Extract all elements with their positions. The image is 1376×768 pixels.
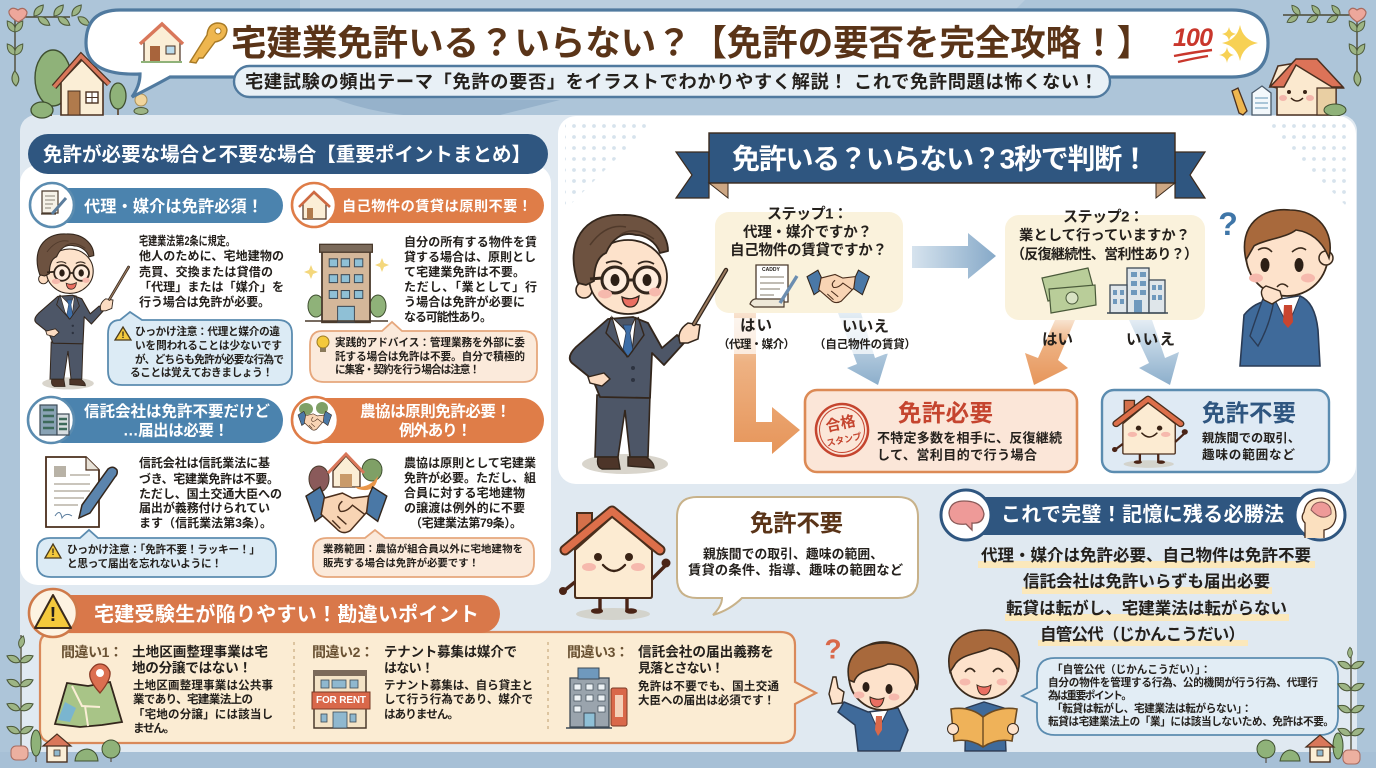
step 1: 代理・媒介ですか？	[743, 223, 872, 241]
arrow: step 2 no	[1129, 320, 1179, 385]
heading	[941, 490, 1345, 540]
icon: pass stamp	[811, 399, 873, 461]
mnemonic lines	[978, 545, 1315, 646]
mistake 1: 「宅地の分譲」には該当し	[133, 707, 273, 721]
icon: teacher	[570, 215, 726, 474]
icon: thinking student: ?	[1218, 206, 1238, 242]
icon: handshake with house and vegetables	[306, 454, 387, 533]
text block	[139, 233, 284, 309]
card: agency	[30, 183, 292, 389]
callout: advice: に集客・契約を行う場合は注意！	[335, 363, 480, 376]
subtitle pill	[234, 66, 1110, 97]
branch labels: （代理・媒介）	[718, 337, 795, 351]
callout: trap	[37, 530, 276, 577]
top-left corner vine	[5, 3, 92, 86]
text block: 合員に対する宅地建物	[404, 485, 525, 500]
branch labels: はい	[740, 318, 772, 334]
icon: office with sign	[566, 668, 627, 728]
mistake 2: テナント募集は、自ら貸主と	[384, 678, 533, 692]
branch labels: いいえ	[842, 318, 889, 336]
callout: advice: 託する場合は免許は不要。自分で積極的	[335, 350, 525, 363]
mistake 2: はありません。	[384, 708, 459, 721]
branch labels: いいえ	[1126, 330, 1175, 348]
icon: handshake	[807, 270, 869, 303]
text block: 届出が義務付けられてい	[139, 500, 270, 515]
callout: trap: !	[122, 330, 124, 340]
icon: for rent building	[312, 670, 370, 728]
card heading: 農協は原則免許必要！	[360, 402, 511, 420]
text block: 信託会社は信託業法に基	[139, 455, 270, 470]
icon: pass stamp: スタンプ	[825, 430, 863, 448]
callout: advice	[310, 322, 537, 382]
card: trust company	[28, 397, 283, 577]
callout: scope: 業務範囲：農協が組合員以外に宅地建物を	[323, 542, 523, 556]
icon: house character	[559, 511, 670, 620]
mnemonic lines: 自管公代（じかんこうだい）	[1040, 624, 1245, 644]
card heading: …届出は必要！	[123, 422, 229, 440]
panel: memory tips	[941, 490, 1345, 735]
text block: 他人のために、宅地建物の	[139, 248, 284, 263]
mistake 1: 土地区画整理事業は宅	[132, 644, 268, 660]
icon: for rent building: FOR RENT	[316, 695, 366, 706]
callout: trap: が、どちらも免許が必要な行為で	[135, 353, 284, 366]
icon: pointing student	[824, 634, 918, 751]
mistake 3	[566, 644, 780, 728]
callout: scope	[313, 530, 534, 577]
card heading	[292, 397, 544, 443]
top-left house scene	[31, 50, 148, 118]
text block	[404, 234, 537, 324]
icon: document and pen	[46, 457, 117, 527]
result: license required: して、営利目的で行う場合	[877, 448, 1037, 462]
callout: trap: と思って届出を忘れないように！	[67, 557, 222, 570]
panel: license summary	[20, 134, 551, 585]
icon: teacher	[35, 234, 129, 389]
result: license not required	[1102, 390, 1329, 472]
step 2: （反復継続性、営利性あり？）	[1011, 246, 1198, 262]
mistake 1	[55, 644, 274, 735]
mnemonic lines: 信託会社は免許いらずも届出必要	[1023, 571, 1270, 591]
mistake 1: 土地区画整理事業は公共事	[133, 678, 274, 692]
text block: 行う場合は免許が必要。	[139, 294, 270, 309]
card heading: 例外あり！	[399, 420, 472, 440]
text block: 農協は原則として宅建業	[404, 455, 536, 470]
bottom-left plant scene	[6, 635, 120, 762]
text block: 貸する場合は、原則とし	[404, 249, 536, 264]
arrow: step 1 no	[838, 313, 888, 385]
step 1	[715, 206, 903, 313]
branch labels: （自己物件の賃貸）	[814, 337, 916, 351]
text block: の譲渡は例外的に不要	[404, 500, 525, 515]
icon: contract: CADDY	[762, 267, 780, 273]
icon: map with pin	[55, 664, 122, 727]
speech bubble: not required: 賃貸の条件、指導、趣味の範囲など	[688, 562, 903, 578]
branch labels	[716, 318, 1175, 354]
icon: pass stamp: 合格	[824, 412, 857, 436]
callout: explanation: 「自管公代（じかんこうだい）」：	[1052, 663, 1211, 676]
mistake 2: して行う行為であり、媒介で	[384, 692, 533, 706]
text block: （宅建業法第79条）。	[410, 515, 522, 530]
text block	[139, 455, 282, 530]
mistake 1: ません。	[133, 722, 175, 735]
speech bubble: not required: 免許不要	[750, 510, 843, 536]
text block: 免許が必要。ただし、組	[404, 470, 536, 485]
mistake 3: 大臣への届出は必須です！	[638, 693, 775, 707]
icon: title house	[140, 24, 183, 62]
text block: ただし、「業として」行	[404, 279, 537, 294]
icon: pointing student: ?	[824, 634, 842, 664]
heading: 宅建受験生が陥りやすい！勘違いポイント	[94, 602, 479, 626]
result: license not required: 免許不要	[1202, 400, 1296, 426]
bottom-right plant scene	[1257, 647, 1365, 764]
banner heading	[676, 133, 1205, 198]
card: agricultural cooperative	[292, 397, 544, 577]
callout: explanation: 為は重要ポイント。	[1048, 689, 1132, 702]
result: license not required: 趣味の範囲など	[1202, 447, 1295, 462]
callout: trap: ることは覚えておきましょう！	[130, 366, 273, 379]
text block: ます（信託業法第3条）。	[139, 515, 272, 530]
step 1: 自己物件の賃貸ですか？	[730, 241, 887, 259]
result: license not required: 親族間での取引、	[1202, 430, 1300, 445]
icon: reading student	[948, 630, 1019, 751]
card heading	[30, 183, 283, 227]
branch labels: はい	[1042, 332, 1073, 348]
callout: trap: ひっかけ注意：「免許不要！ラッキー！」	[67, 543, 260, 556]
title: 宅建業免許いる？いらない？【免許の要否を完全攻略！】	[231, 23, 1152, 63]
text block	[404, 455, 536, 530]
text block: 宅建業法第2条に規定。	[139, 233, 235, 248]
card heading: 代理・媒介は免許必須！	[84, 197, 263, 216]
mistake 3: 免許は不要でも、国土交通	[638, 679, 780, 693]
mistake 1: 業であり、宅建業法上の	[133, 692, 253, 706]
heading: summary: 免許が必要な場合と不要な場合【重要ポイントまとめ】	[43, 143, 531, 166]
panel: common mistakes	[29, 589, 816, 743]
callout: explanation: 自分の物件を管理する行為、公的機関が行う行為、代理行	[1048, 676, 1318, 689]
icon: house character	[1112, 399, 1188, 468]
arrow: step 1 to step 2	[912, 233, 996, 279]
callout: explanation: 「転貸は転がし、宅建業法は転がらない」：	[1052, 702, 1252, 715]
mnemonic lines: 代理・媒介は免許必要、自己物件は免許不要	[981, 545, 1311, 565]
step 2: ステップ2：	[1063, 208, 1144, 226]
heading	[29, 589, 500, 637]
icon: sparkles	[1219, 25, 1258, 63]
mistake 3: 間違い3：	[567, 644, 629, 660]
step 1: ステップ1：	[767, 206, 848, 222]
speech bubble: not required: 親族間での取引、趣味の範囲、	[703, 546, 883, 562]
text block: 「代理」または「媒介」を	[139, 279, 284, 294]
arrow: step 2 yes	[1025, 320, 1075, 385]
text block: なる可能性あり。	[404, 309, 492, 324]
step 2	[1005, 208, 1205, 320]
panel: 3-second flowchart	[558, 116, 1356, 484]
mistake 2: テナント募集は媒介で	[384, 644, 517, 660]
icon: key	[190, 23, 227, 63]
icon: contract	[750, 265, 797, 307]
result: license required	[805, 390, 1077, 472]
result: license required: 不特定多数を相手に、反復継続	[877, 430, 1062, 446]
result: license required: 免許必要	[898, 400, 993, 426]
callout: explanation	[1022, 658, 1338, 735]
card heading: 信託会社は免許不要だけど	[84, 402, 270, 420]
mistake 1: 間違い1：	[61, 644, 123, 660]
mistake 2: はない！	[384, 660, 434, 676]
arrow: step 1 yes	[734, 313, 800, 454]
text block: 売買、交換または貸借の	[139, 264, 273, 279]
card heading: 自己物件の賃貸は原則不要！	[342, 198, 532, 215]
card heading	[292, 183, 544, 227]
icon: money	[1042, 268, 1096, 313]
speech bubble: not required	[677, 497, 918, 615]
text block: づき、宅建業免許は不要。	[139, 471, 279, 486]
callout: explanation: 転貸は宅建業法上の「業」には該当しないため、免許は不要。	[1048, 715, 1334, 728]
mistake 3: 信託会社の届出義務を	[638, 644, 774, 660]
card: own property	[292, 183, 544, 382]
icon: apartment building	[304, 244, 389, 322]
icon: office buildings	[1107, 268, 1168, 313]
callout: trap: !	[52, 547, 54, 557]
step 2: 業として行っていますか？	[1019, 226, 1190, 244]
title speech bubble	[86, 10, 1268, 97]
mistake 3: 見落とさない！	[638, 660, 724, 676]
callout: trap: いを問われることは少ないです	[135, 339, 282, 352]
callout: trap: ひっかけ注意：代理と媒介の違	[135, 325, 280, 338]
text block: 自分の所有する物件を賃	[404, 234, 537, 249]
callout: scope: 販売する場合は免許が必要です！	[323, 556, 479, 570]
text block: て宅建業免許は不要。	[404, 264, 525, 279]
text block: ただし、国土交通大臣への	[139, 486, 282, 501]
mistake 1: 地の分譲ではない！	[132, 660, 252, 676]
subtitle pill: 宅建試験の頻出テーマ「免許の要否」をイラストでわかりやすく解説！ これで免許問題は怖くない！	[245, 71, 1098, 92]
mistake 2: 間違い2：	[312, 644, 374, 660]
text block: う場合は免許が必要に	[404, 294, 525, 309]
icon: thinking student	[1218, 206, 1333, 366]
top-right house scene	[1232, 59, 1346, 116]
card heading	[28, 397, 283, 443]
icon: 100 points: 100	[1173, 24, 1213, 52]
mistake 2	[312, 644, 533, 728]
mnemonic lines: 転貸は転がし、宅建業法は転がらない	[1006, 598, 1287, 618]
heading: summary	[28, 134, 548, 174]
callout: advice: 実践的アドバイス：管理業務を外部に委	[335, 336, 525, 349]
heading: これで完璧！記憶に残る必勝法	[1001, 502, 1284, 526]
top-right corner vine	[1283, 4, 1367, 86]
callout: trap	[108, 312, 292, 385]
banner heading: 免許いる？いらない？3秒で判断！	[732, 144, 1149, 174]
heading: !	[50, 604, 56, 626]
